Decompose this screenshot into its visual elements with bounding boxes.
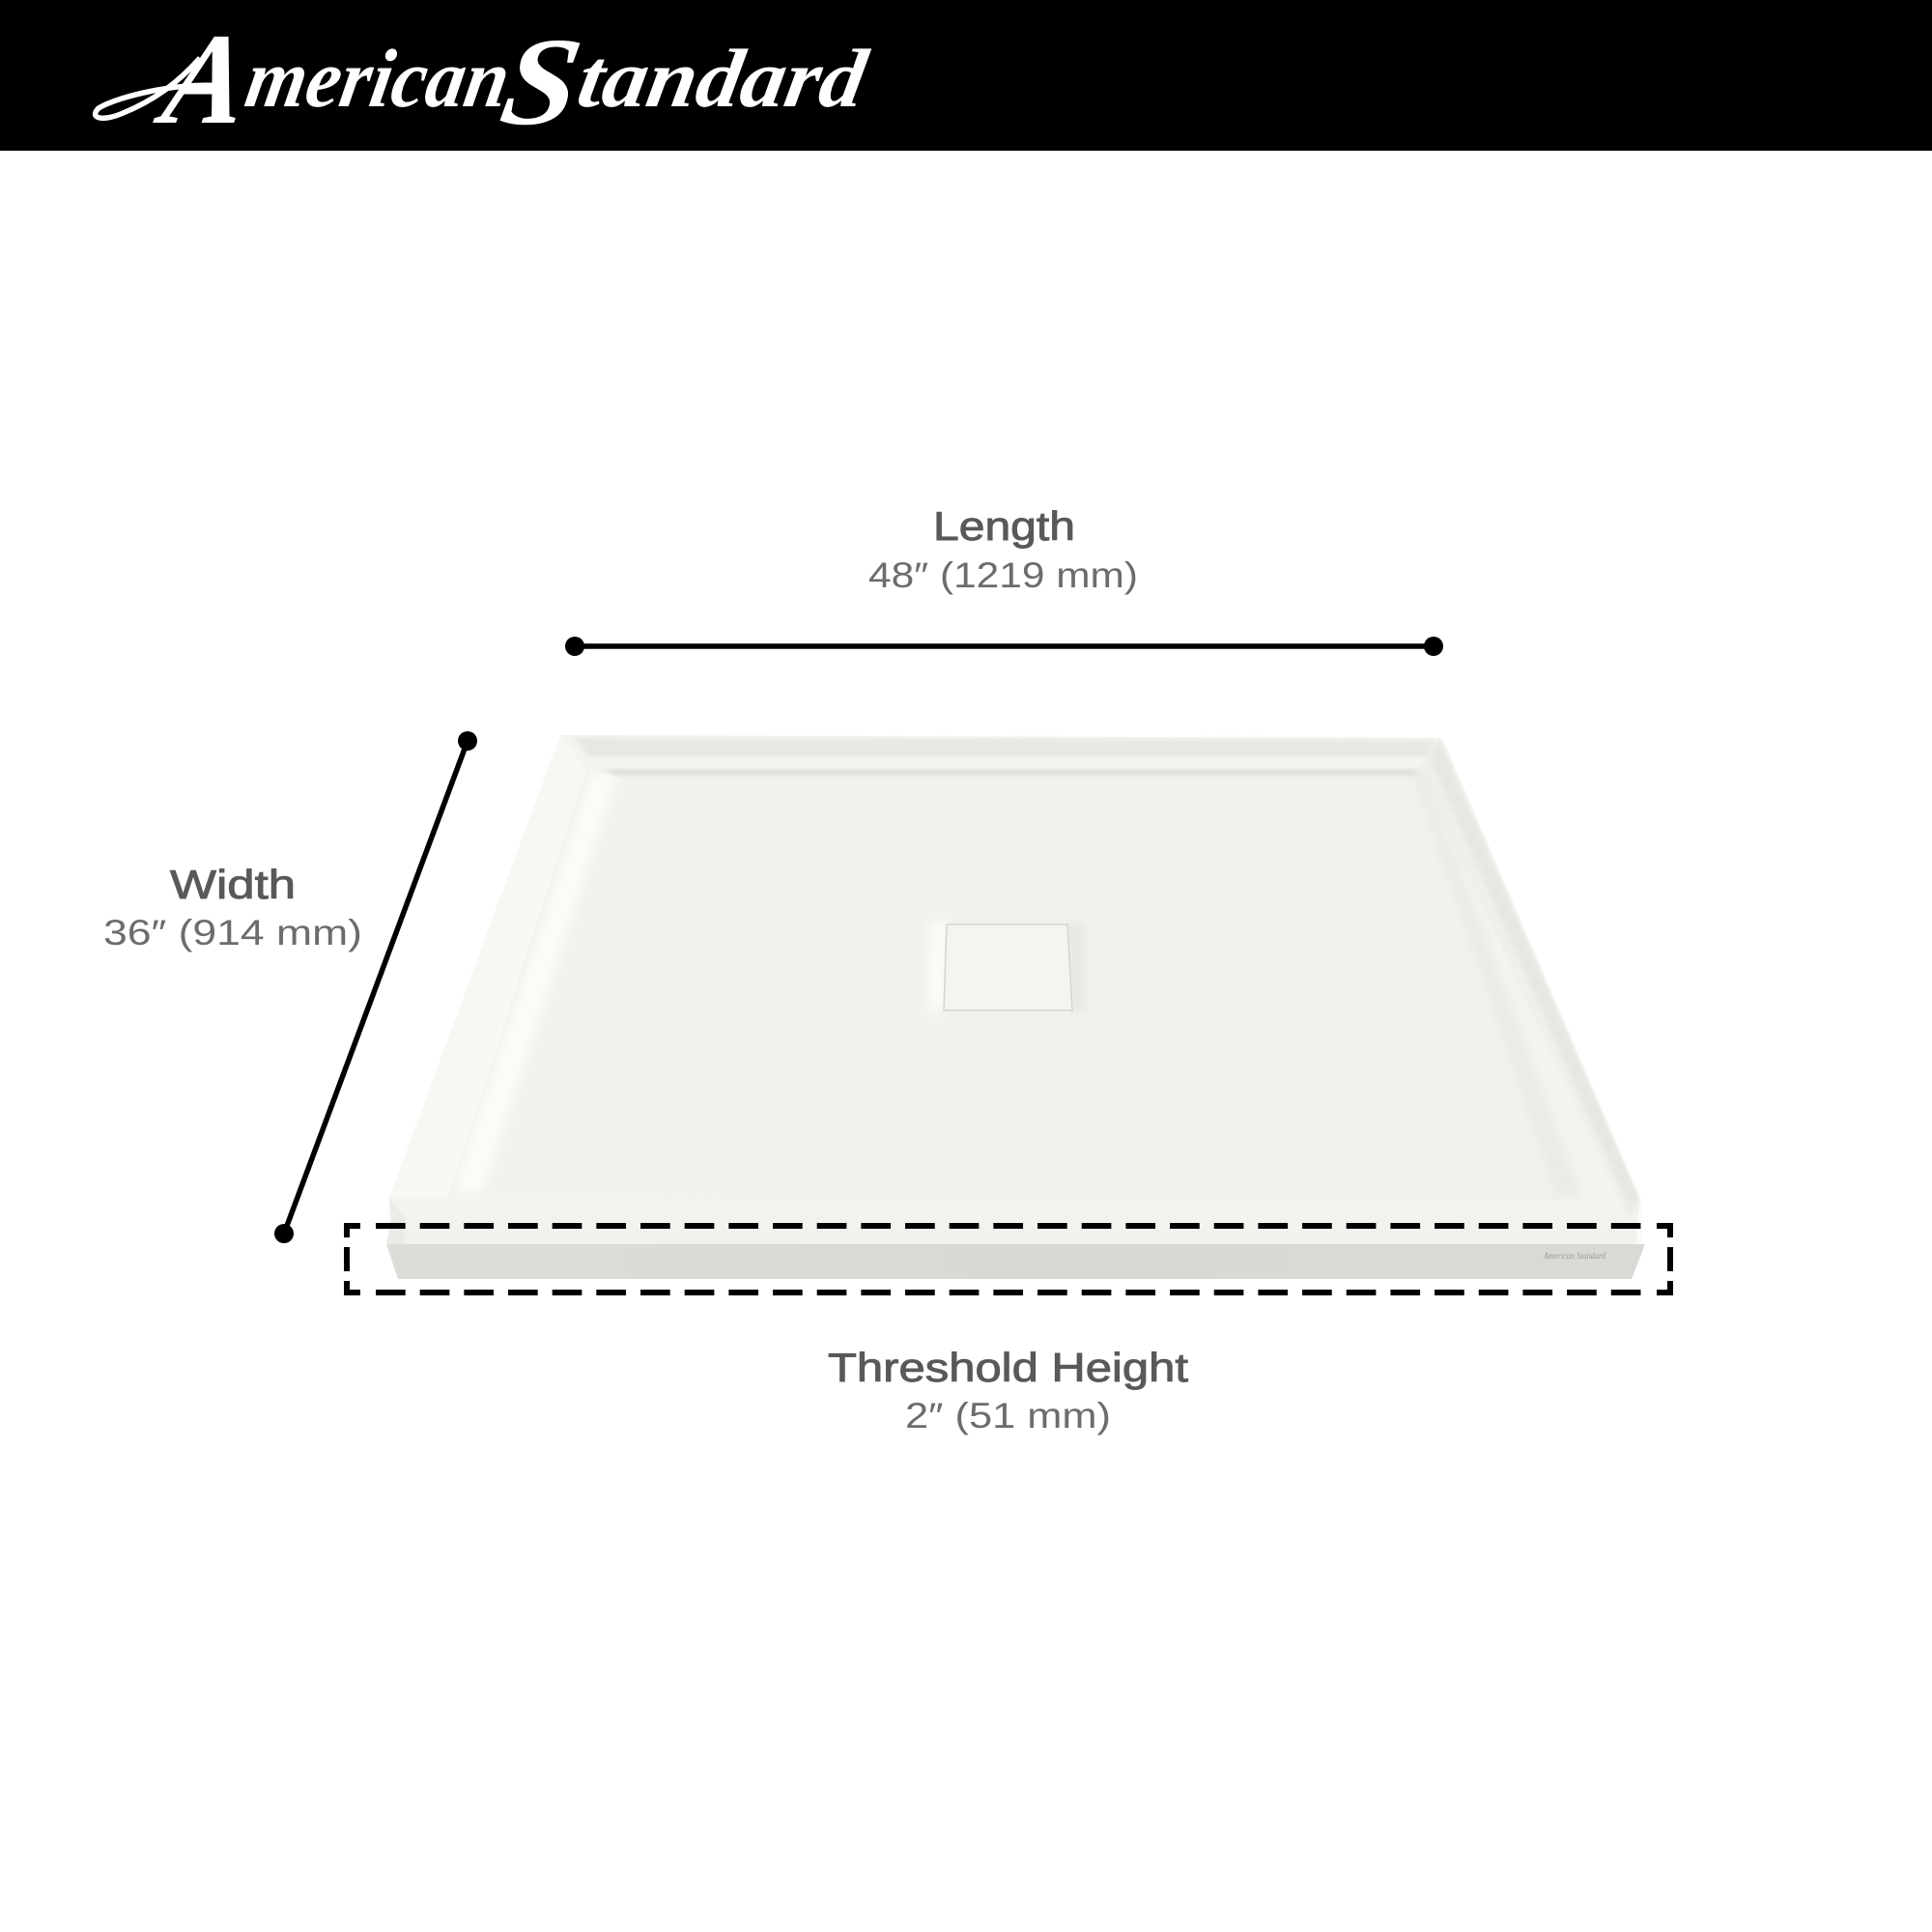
tray top surface <box>386 735 1645 1246</box>
label: threshold height: 2″ (51 mm) <box>905 1396 1111 1435</box>
left corner edge <box>386 1198 406 1244</box>
drain <box>928 923 1084 1010</box>
basin right wall shade <box>1412 773 1581 1198</box>
label: length: 48″ (1219 mm) <box>868 555 1138 595</box>
logo: American Standard: tandard <box>571 33 875 125</box>
shower base tray <box>386 735 1645 1279</box>
small embossed logo: American Standard <box>1543 1251 1605 1261</box>
threshold lip <box>388 1200 1642 1244</box>
label: length: Length <box>933 503 1075 549</box>
width dimension line <box>274 731 477 1243</box>
label: width: 36″ (914 mm) <box>103 913 362 952</box>
label: threshold height <box>828 1345 1188 1435</box>
right rim wall <box>1418 740 1639 1219</box>
basin floor <box>447 770 1581 1200</box>
label: width <box>103 862 362 952</box>
back rim band <box>574 738 1435 756</box>
label: width: Width <box>170 862 296 907</box>
logo: American Standard: A <box>147 8 260 152</box>
label: length <box>868 503 1138 595</box>
drain recess shading <box>928 923 947 1010</box>
label: threshold height: Threshold Height <box>828 1345 1188 1390</box>
basin left highlight <box>452 773 618 1193</box>
length dimension line <box>565 637 1443 656</box>
logo: American Standard: S <box>492 13 591 152</box>
front threshold face <box>386 1244 1645 1279</box>
left rim <box>389 735 586 1198</box>
logo: American Standard: merican <box>240 33 517 125</box>
logo: American Standard <box>96 8 878 152</box>
basin back shadow <box>599 769 1420 776</box>
drain cover <box>944 924 1072 1010</box>
threshold dashed highlight box <box>347 1226 1670 1293</box>
header band <box>0 0 1932 152</box>
